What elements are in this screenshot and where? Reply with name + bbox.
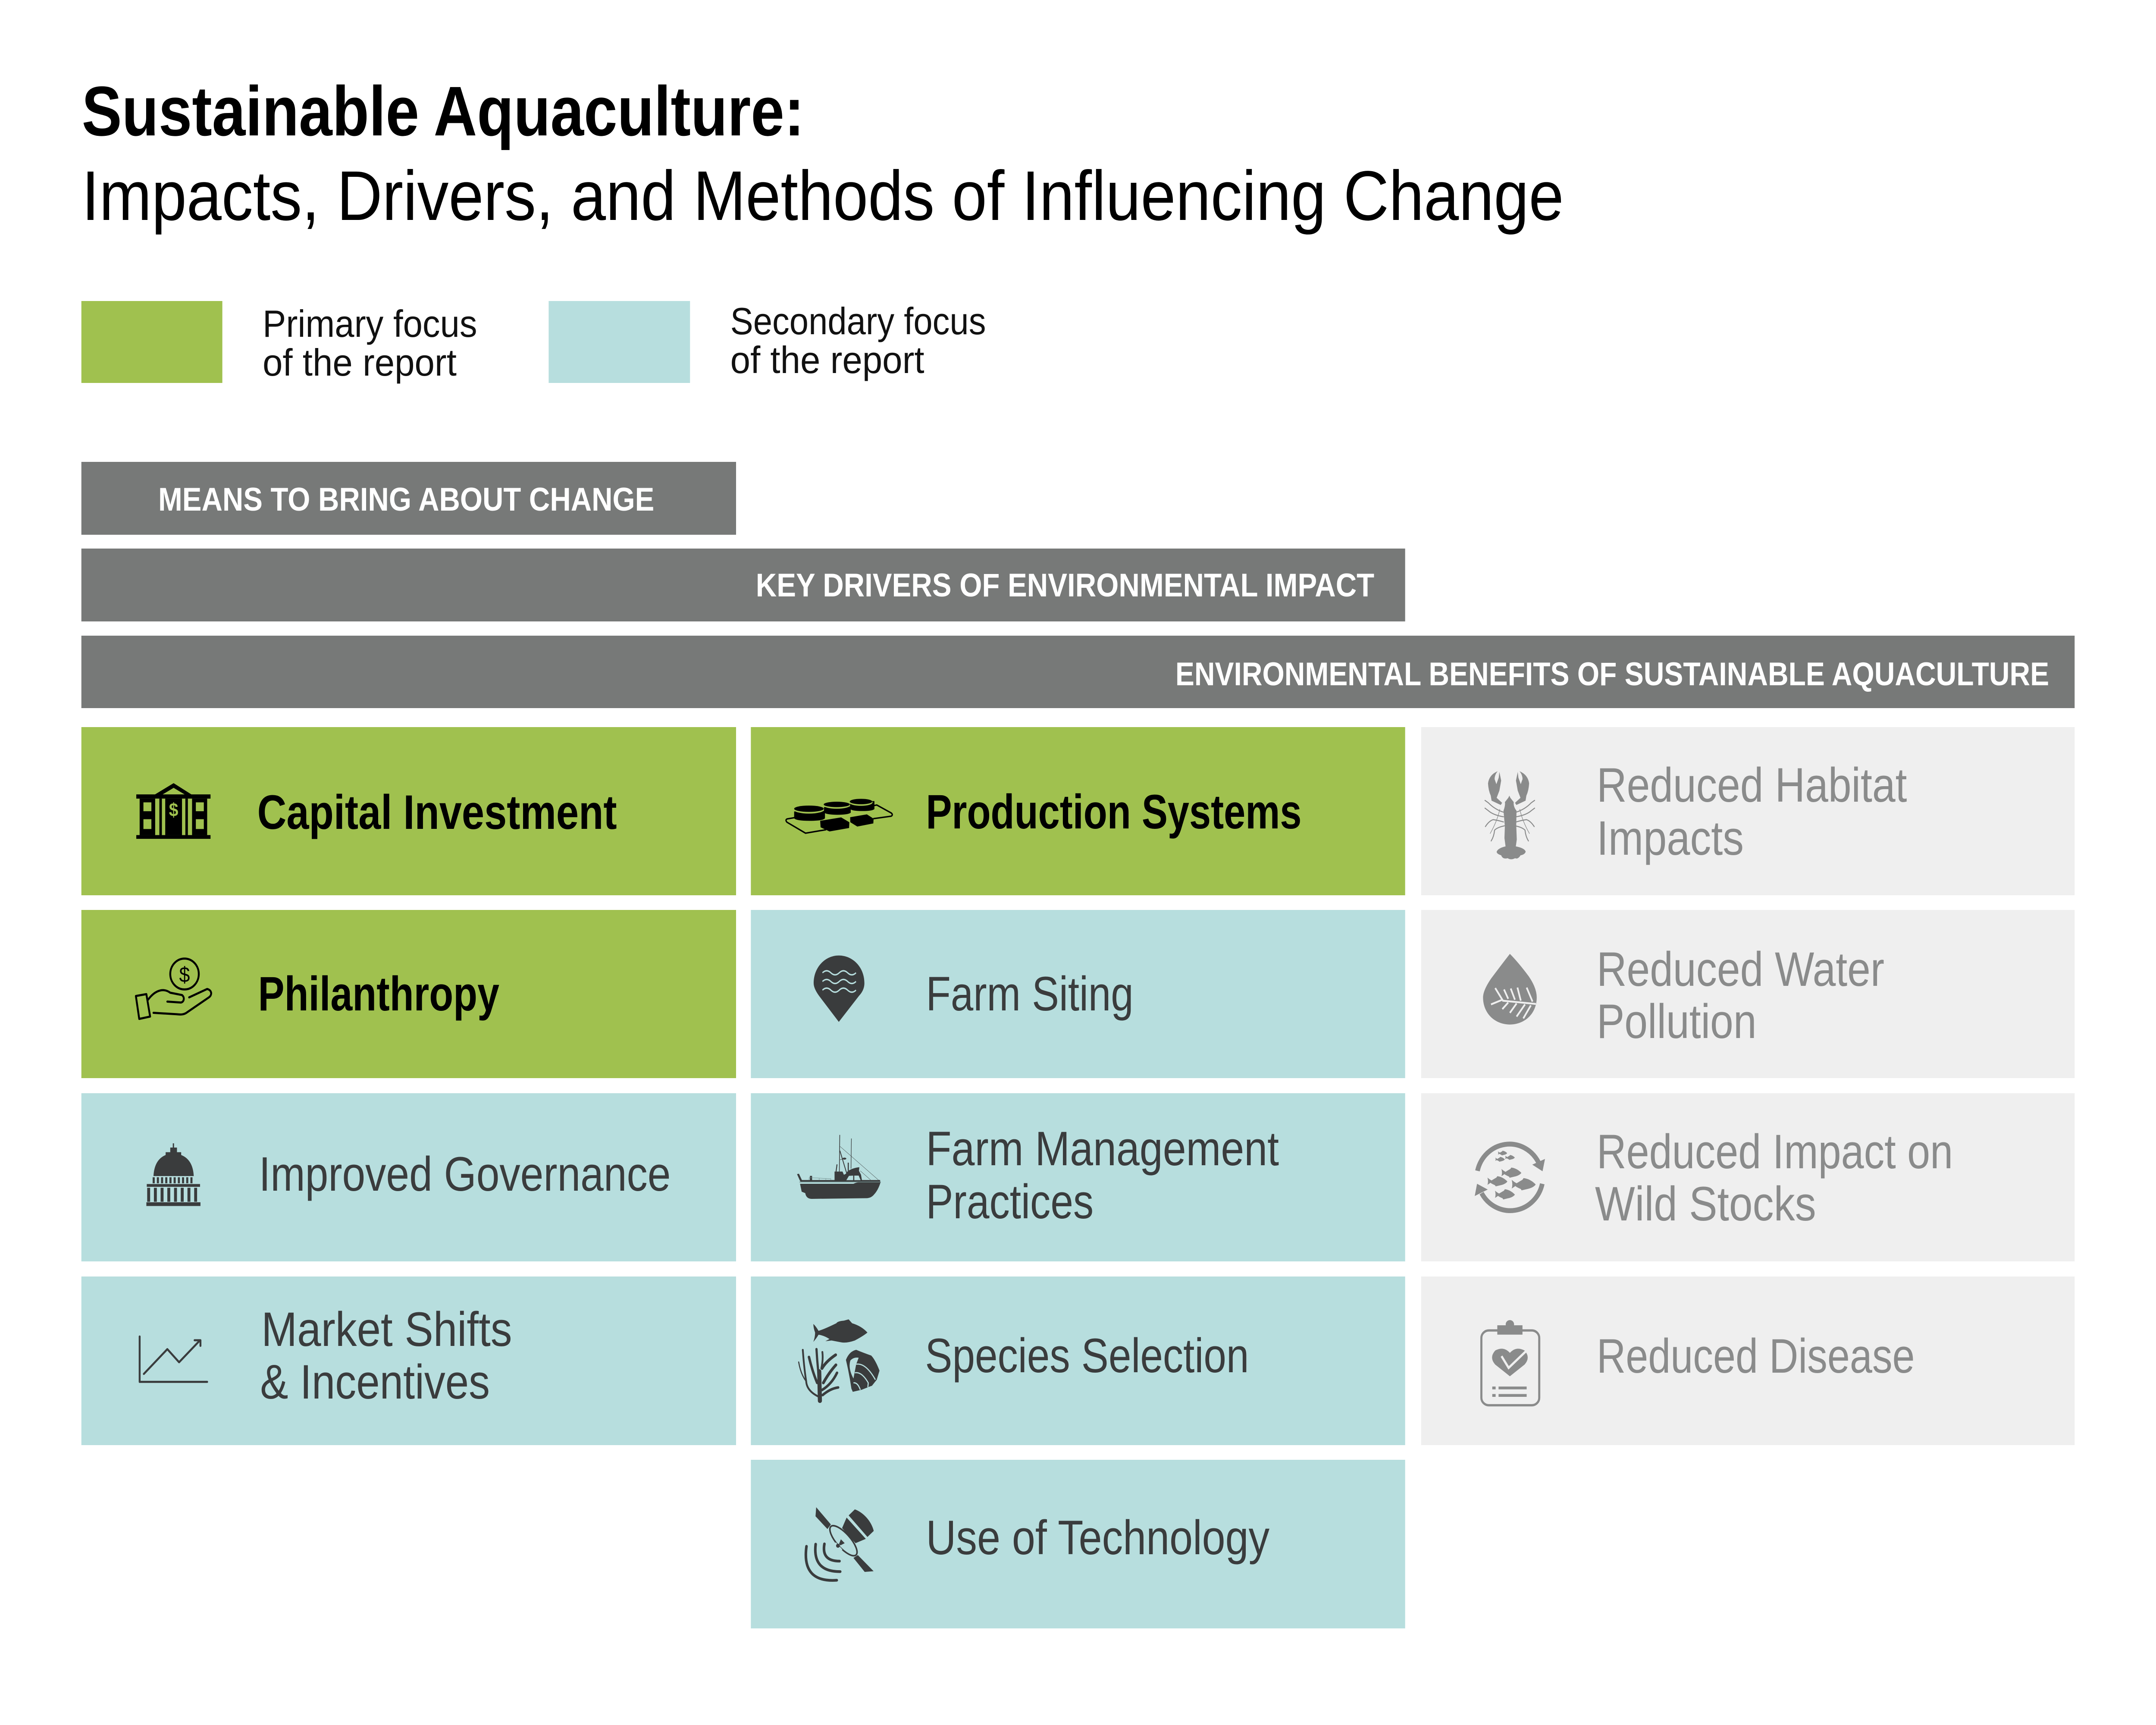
panel: capital investment	[81, 727, 736, 895]
icon: lobster	[1485, 771, 1535, 859]
header bar: means to bring about change	[81, 462, 736, 535]
title: Impacts, Drivers, and Methods of Influencing Change	[82, 157, 1564, 235]
panel: farm siting	[751, 910, 1405, 1078]
panel: species selection	[751, 1276, 1405, 1445]
header bar: means to bring about change: MEANS TO BRING ABOUT CHANGE	[158, 481, 654, 518]
label: & Incentives	[260, 1355, 490, 1409]
legend: secondary focus: of the report	[730, 339, 924, 381]
label: Reduced Impact on	[1597, 1125, 1953, 1179]
panel: improved governance	[81, 1093, 736, 1261]
header bar: key drivers of environmental impact	[81, 549, 1405, 621]
legend: secondary focus	[548, 300, 986, 383]
panel: reduced water pollution	[1421, 910, 2075, 1078]
panel: reduced disease	[1421, 1276, 2075, 1445]
panel: use of technology	[751, 1460, 1405, 1628]
label: Improved Governance	[259, 1148, 671, 1201]
label: Farm Siting	[926, 967, 1134, 1021]
legend: primary focus: of the report	[263, 342, 457, 384]
label: Pollution	[1597, 995, 1757, 1049]
icon: capitol	[146, 1143, 201, 1206]
icon: fishing boat	[797, 1135, 881, 1199]
label: Production Systems	[926, 785, 1301, 839]
icon: water drop with leaf	[1483, 954, 1537, 1025]
header bar: key drivers of environmental impact: KEY DRIVERS OF ENVIRONMENTAL IMPACT	[756, 567, 1374, 603]
label: Farm Management	[926, 1122, 1279, 1176]
legend: secondary focus: Secondary focus	[730, 300, 986, 342]
label	[1595, 1125, 1953, 1231]
icon: fish, seaweed and oyster	[799, 1319, 880, 1401]
label: Wild Stocks	[1595, 1177, 1816, 1231]
icon: hand with coin: $	[179, 963, 190, 987]
label: Species Selection	[925, 1329, 1249, 1383]
panel: reduced impact on wild stocks	[1421, 1093, 2075, 1261]
label: Reduced Habitat	[1597, 759, 1907, 812]
panel: production systems	[751, 727, 1405, 895]
label	[1597, 759, 1907, 866]
panel: farm management practices	[751, 1093, 1405, 1261]
title	[82, 72, 1564, 235]
icon: aquaculture pens	[786, 799, 892, 833]
header bar: environmental benefits of sustainable aquaculture	[81, 636, 2075, 708]
icon: bank	[136, 783, 210, 839]
label	[260, 1303, 512, 1409]
header bar: environmental benefits of sustainable aquaculture: ENVIRONMENTAL BENEFITS OF SUSTAINABLE AQUACULTURE	[1175, 656, 2049, 692]
icon: bank: $	[169, 800, 179, 821]
icon: map pin with waves	[814, 956, 865, 1022]
icon: satellite	[806, 1507, 874, 1581]
legend: primary focus	[81, 301, 477, 384]
label: Impacts	[1597, 812, 1744, 866]
panel: reduced habitat impacts	[1421, 727, 2075, 895]
icon: line chart	[140, 1336, 207, 1382]
label: Capital Investment	[257, 786, 617, 840]
label: Market Shifts	[261, 1303, 512, 1357]
panel: philanthropy	[81, 910, 736, 1078]
icon: fish in circular arrows	[1475, 1144, 1545, 1211]
panel: market shifts and incentives	[81, 1276, 736, 1445]
label	[926, 1122, 1279, 1229]
title: Sustainable Aquaculture:	[82, 72, 804, 151]
label: Use of Technology	[926, 1511, 1269, 1565]
legend: primary focus: Primary focus	[263, 303, 477, 345]
label: Practices	[926, 1175, 1094, 1229]
label: Reduced Disease	[1597, 1330, 1915, 1383]
label: Philanthropy	[258, 967, 499, 1021]
icon: clipboard with heart	[1481, 1320, 1539, 1405]
label	[1597, 943, 1884, 1049]
icon: hand with coin	[136, 959, 211, 1019]
label: Reduced Water	[1597, 943, 1884, 997]
